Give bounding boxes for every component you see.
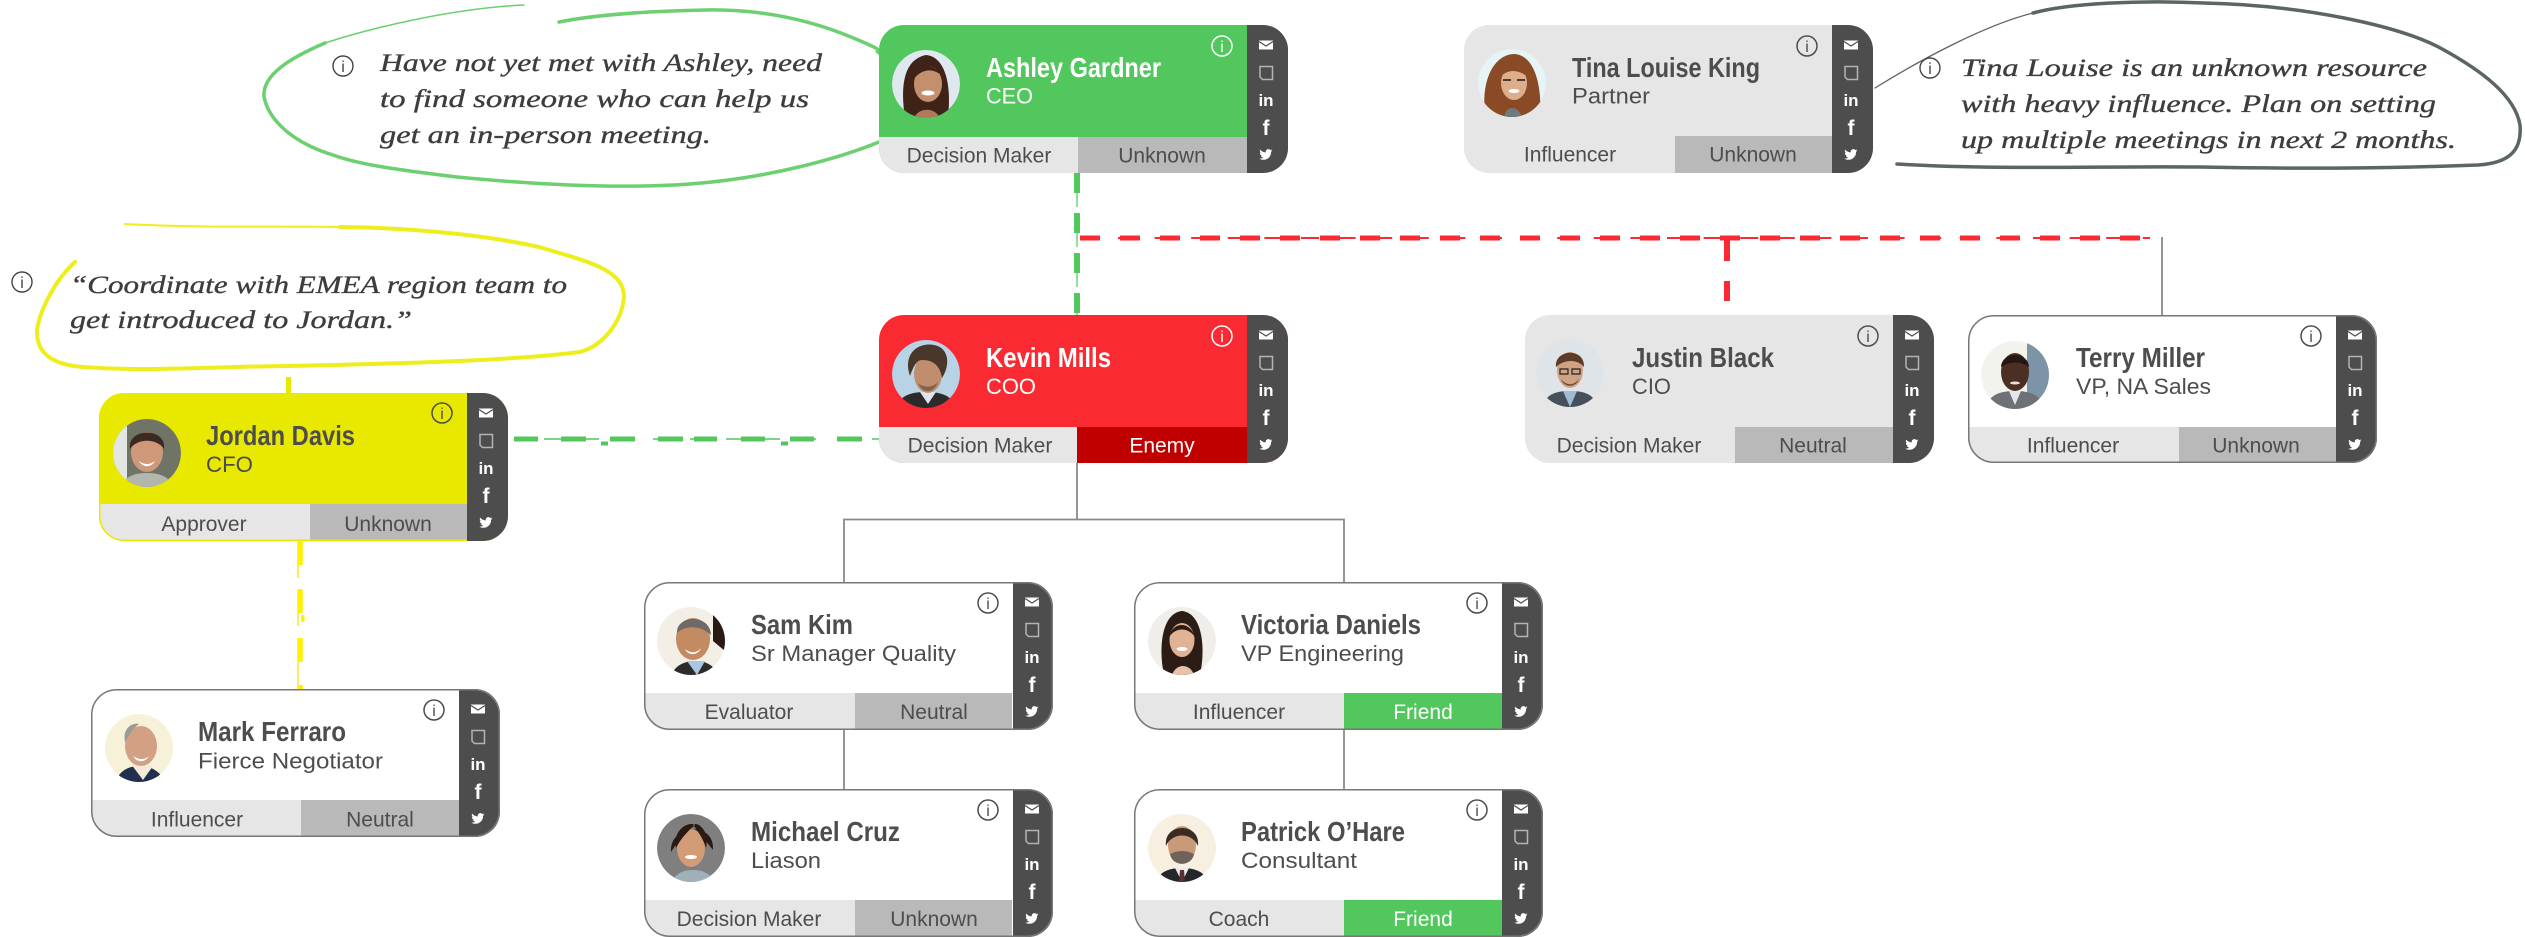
name: Victoria Daniels [1241, 609, 1421, 640]
card: Michael Cruz [644, 789, 1053, 937]
note: Ashley [264, 5, 879, 186]
icon: info: i [432, 703, 436, 720]
role: Decision Maker [677, 908, 821, 931]
card body [1968, 315, 2377, 463]
card body [1134, 789, 1543, 937]
icon: info [1797, 36, 1817, 56]
role: Decision Maker [907, 144, 1051, 168]
connector: to Terry gray line [2161, 237, 2163, 316]
connector: Kevin to direct reports [844, 463, 1344, 789]
card body [1134, 582, 1543, 730]
card body [644, 789, 1053, 937]
avatar [113, 419, 181, 487]
job title: Liason [751, 848, 821, 873]
card body [879, 25, 1288, 173]
hand-drawn green outline [264, 5, 879, 186]
icon: info: i [341, 59, 345, 76]
card body [879, 315, 1288, 463]
role: Influencer [151, 808, 243, 832]
social icons [1513, 804, 1529, 924]
icon: info: i [20, 275, 24, 292]
job title: Fierce Negotiator [198, 748, 383, 774]
role: Decision Maker [908, 434, 1052, 458]
card: Sam Kim [644, 582, 1053, 730]
social icons [478, 408, 494, 528]
name: Justin Black [1632, 342, 1774, 373]
avatar [1148, 814, 1216, 882]
social icons: f [1262, 407, 1270, 430]
note: Tina [1875, 2, 2520, 168]
icon: info [1212, 36, 1232, 56]
social icons: f [1518, 881, 1526, 904]
card: Justin Black [1525, 315, 1934, 463]
role: Evaluator [705, 701, 793, 724]
note text: get an in-person meeting. [380, 122, 711, 149]
status: Neutral [900, 701, 968, 724]
name: Terry Miller [2076, 342, 2205, 373]
card: Tina Louise King [1464, 25, 1873, 173]
avatar [657, 814, 725, 882]
icon: info: i [1805, 39, 1809, 56]
card: Jordan Davis [99, 393, 508, 541]
hand-drawn gray outline [1875, 2, 2520, 168]
card: Mark Ferraro [91, 689, 500, 837]
social icons [1843, 40, 1859, 160]
social icons [1258, 40, 1274, 160]
icon: info [1212, 326, 1232, 346]
hand-drawn yellow outline [37, 224, 624, 369]
icon: info: i [1475, 596, 1479, 613]
avatar [892, 50, 960, 118]
social icons: in [1258, 381, 1274, 400]
card border [645, 790, 1052, 936]
status: Unknown [890, 908, 978, 931]
icon: info: i [986, 596, 990, 613]
social icons: f [1262, 117, 1270, 140]
social icons: in [2347, 381, 2363, 400]
icon: info [12, 272, 32, 292]
status: Friend [1393, 701, 1453, 724]
social icons: in [1258, 91, 1274, 110]
icon: info [978, 800, 998, 820]
name: Tina Louise King [1572, 52, 1760, 83]
status: Unknown [1709, 144, 1797, 166]
icon: info [1858, 326, 1878, 346]
social icons: f [482, 485, 490, 508]
status: Enemy [1129, 434, 1195, 458]
icon: info: i [1866, 329, 1870, 346]
name: Sam Kim [751, 609, 853, 640]
social icons [1258, 330, 1274, 450]
role: Approver [161, 513, 247, 536]
social icons: f [1028, 881, 1036, 904]
role: Influencer [2027, 434, 2119, 458]
icon: info [978, 593, 998, 613]
status: Unknown [2212, 434, 2300, 458]
card border [92, 690, 499, 836]
social icons: in [1024, 648, 1040, 667]
job title: Sr Manager Quality [751, 641, 956, 666]
name: Michael Cruz [751, 816, 900, 847]
social icons: in [1513, 855, 1529, 874]
job title: VP Engineering [1241, 641, 1404, 666]
role: Coach [1209, 908, 1269, 931]
icon: info: i [1220, 39, 1224, 56]
status: Unknown [1118, 144, 1206, 168]
connector: Ashley to Kevin green dashed [1074, 173, 1080, 315]
social icons: in [478, 459, 494, 478]
avatar [657, 607, 725, 675]
note text [70, 272, 567, 334]
note text: to find someone who can help us [380, 86, 809, 113]
role: Decision Maker [1557, 434, 1701, 458]
note text: with heavy influence. Plan on setting [1961, 91, 2436, 118]
social icons [1904, 330, 1920, 450]
card border [1135, 790, 1542, 936]
role: Influencer [1193, 701, 1285, 724]
card: Victoria Daniels [1134, 582, 1543, 730]
job title: CEO [986, 84, 1033, 108]
name: Ashley Gardner [986, 52, 1161, 83]
note text: up multiple meetings in next 2 months. [1961, 127, 2456, 154]
note text: Tina Louise is an unknown resource [1961, 55, 2427, 82]
card: Patrick O'Hare [1134, 789, 1543, 937]
connector: Ashley to Justin and Terry red dashed [1080, 238, 2150, 301]
card: Terry Miller [1968, 315, 2377, 463]
note text: “Coordinate with EMEA region team to [70, 272, 567, 299]
card body [1464, 25, 1873, 173]
avatar [892, 340, 960, 408]
social icons: in [1513, 648, 1529, 667]
card border [1135, 583, 1542, 729]
social icons: f [1028, 674, 1036, 697]
name: Jordan Davis [206, 420, 355, 451]
icon: info [333, 56, 353, 76]
status: Neutral [1779, 434, 1847, 458]
icon: info [1467, 800, 1487, 820]
connector: yellow note stub to Jordan [286, 377, 291, 393]
social icons [1024, 804, 1040, 924]
social icons: f [1518, 674, 1526, 697]
card border [645, 583, 1052, 729]
note: Jordan [12, 224, 624, 369]
job title: Consultant [1241, 848, 1357, 873]
avatar [1547, 352, 1593, 407]
avatar [1981, 341, 2049, 409]
social icons: in [470, 755, 486, 774]
job title: CIO [1632, 374, 1671, 399]
icon: info: i [986, 803, 990, 820]
icon: info: i [1220, 329, 1224, 346]
note text [379, 50, 823, 149]
social icons: f [2352, 407, 2360, 430]
status: Unknown [344, 513, 432, 536]
note text [1961, 55, 2456, 154]
note text: get introduced to Jordan.” [70, 307, 412, 334]
icon: info [424, 700, 444, 720]
card body [1525, 315, 1934, 463]
connector: Jordan to Kevin green dashed [514, 439, 880, 444]
name: Kevin Mills [986, 342, 1111, 373]
social icons [1024, 598, 1040, 717]
icon: info: i [440, 406, 444, 423]
social icons: in [1024, 855, 1040, 874]
card: Kevin Mills [879, 315, 1288, 463]
social icons: f [1908, 407, 1916, 430]
social icons: in [1843, 91, 1859, 110]
icon: info [2301, 326, 2321, 346]
social icons: in [1904, 381, 1920, 400]
role: Influencer [1524, 144, 1616, 166]
social icons [2347, 330, 2363, 450]
status: Friend [1393, 908, 1453, 931]
icon: info [432, 403, 452, 423]
social icons: f [1848, 117, 1856, 140]
job title: CFO [206, 452, 253, 477]
card body [99, 393, 508, 541]
name: Patrick O’Hare [1241, 816, 1405, 847]
icon: info: i [2309, 329, 2313, 346]
icon: info: i [1928, 61, 1932, 78]
card border [100, 394, 467, 540]
card body [644, 582, 1053, 730]
avatar [105, 714, 173, 782]
job title: VP, NA Sales [2076, 374, 2211, 399]
avatar [1478, 49, 1546, 117]
social icons [1513, 598, 1529, 717]
icon: info: i [1475, 803, 1479, 820]
job title: Partner [1572, 84, 1650, 108]
avatar [1148, 607, 1216, 675]
note text: Have not yet met with Ashley, need [379, 50, 823, 77]
job title: COO [986, 374, 1036, 399]
card border [1969, 316, 2376, 462]
connector: Jordan to Mark yellow dashed [298, 541, 304, 689]
status: Neutral [346, 808, 414, 832]
name: Mark Ferraro [198, 716, 346, 747]
icon: info [1467, 593, 1487, 613]
social icons [470, 704, 486, 824]
social icons: f [474, 781, 482, 804]
card body [91, 689, 500, 837]
icon: info [1920, 58, 1940, 78]
card: Ashley Gardner [879, 25, 1288, 173]
